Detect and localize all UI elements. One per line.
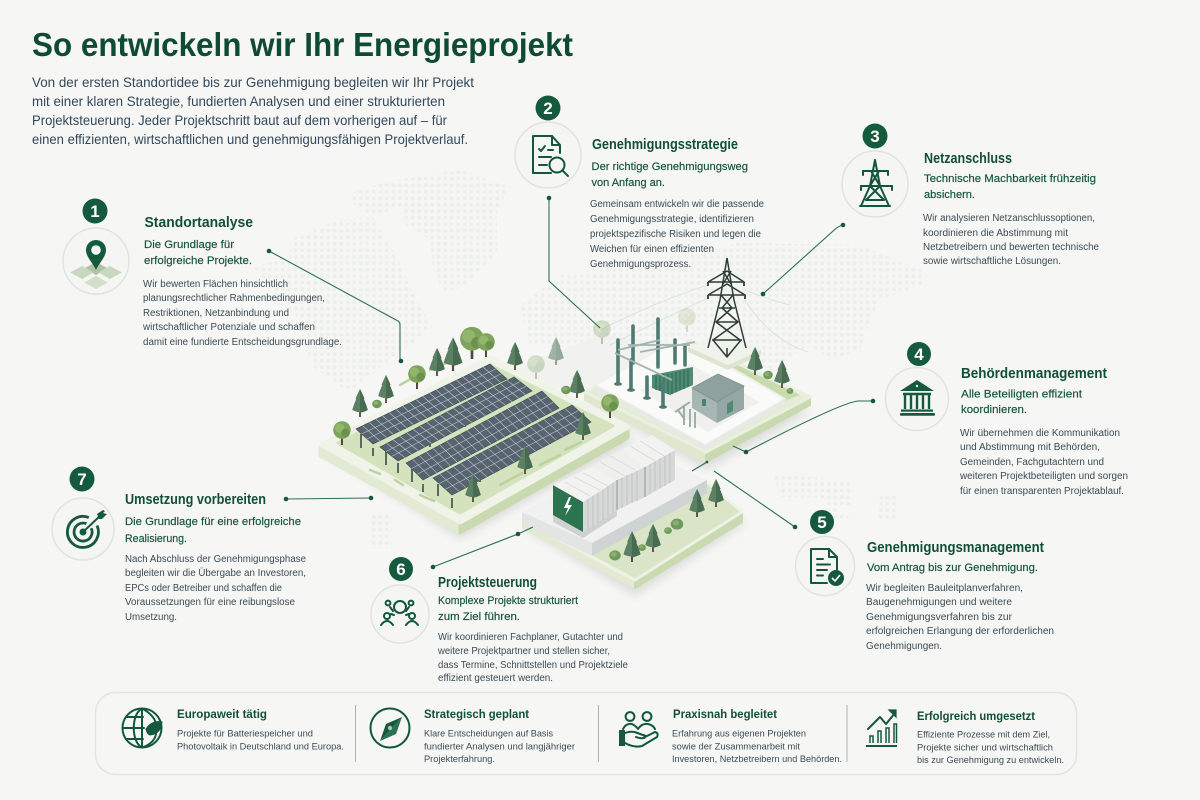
panel: footer benefits bar xyxy=(96,692,1076,774)
body text: effizient gesteuert werden. xyxy=(438,673,553,684)
body text: sowie wirtschaftliche Lösungen. xyxy=(923,256,1061,267)
benefit: Europaweit tätig xyxy=(122,708,344,752)
icon: transmission tower xyxy=(708,258,746,357)
solar panel rows xyxy=(356,364,591,508)
heading: Genehmigungsmanagement xyxy=(867,540,1044,556)
subheading xyxy=(592,161,748,189)
body text: projektspezifische Risiken und legen die xyxy=(590,229,761,240)
heading: Europaweit tätig xyxy=(177,709,267,721)
subheading: zum Ziel führen. xyxy=(438,611,520,623)
number badge 1: 1 xyxy=(90,202,100,221)
text: bis zur Genehmigung zu entwickeln. xyxy=(917,755,1064,766)
icon: pylon xyxy=(842,151,908,217)
icon: document with magnifier xyxy=(515,122,581,188)
number badge 4 xyxy=(907,342,931,366)
body text: Wir übernehmen die Kommunikation xyxy=(960,428,1120,439)
body text: dass Termine, Schnittstellen und Projektziele xyxy=(438,660,628,671)
panel: step 2 Genehmigungsstrategie xyxy=(515,96,764,270)
heading: Standortanalyse xyxy=(144,215,253,231)
number badge 6: 6 xyxy=(396,560,406,579)
battery site trees xyxy=(609,479,724,562)
body text: weiteren Projektbeteiligten und sorgen xyxy=(959,471,1128,482)
text xyxy=(424,728,575,765)
heading: Behördenmanagement xyxy=(961,366,1107,382)
subheading: Technische Machbarkeit frühzeitig xyxy=(924,173,1096,185)
body text xyxy=(866,583,1054,652)
battery storage platform xyxy=(522,447,745,596)
body text: Genehmigungsstrategie, identifizieren xyxy=(590,214,754,225)
heading: Umsetzung vorbereiten xyxy=(125,492,266,508)
body text: Gemeinden, Fachgutachtern und xyxy=(960,457,1104,468)
icon: authority building xyxy=(886,368,948,430)
text xyxy=(177,728,344,752)
text: Erfahrung aus eigenen Projekten xyxy=(672,728,806,740)
panel: step 4 Behördenmanagement xyxy=(886,342,1128,497)
battery containers xyxy=(553,435,675,538)
text: Photovoltaik in Deutschland und Europa. xyxy=(177,742,344,752)
body text: Wir bewerten Flächen hinsichtlich xyxy=(143,279,288,290)
title: So entwickeln wir Ihr Energieprojekt xyxy=(32,26,573,63)
text: Klare Entscheidungen auf Basis xyxy=(424,728,553,740)
panel: step 3 Netzanschluss xyxy=(842,124,1099,267)
icon: rising chart xyxy=(866,710,897,747)
subheading: Alle Beteiligten effizient xyxy=(961,388,1083,400)
body text: Restriktionen, Netzanbindung und xyxy=(143,308,289,319)
subheading: Die Grundlage für eine erfolgreiche xyxy=(125,516,301,528)
number badge 3: 3 xyxy=(870,127,880,146)
subheading xyxy=(438,595,579,623)
body text xyxy=(959,428,1128,497)
body text: Baugenehmigungen und weitere xyxy=(866,597,1012,608)
text: Projekterfahrung. xyxy=(424,754,495,765)
subheading xyxy=(125,516,301,545)
body text: Gemeinsam entwickeln wir die passende xyxy=(590,199,764,210)
number badge 5 xyxy=(810,510,834,534)
benefit: Praxisnah begleitet xyxy=(619,709,842,765)
number badge 2: 2 xyxy=(543,99,553,118)
subheading: Komplexe Projekte strukturiert xyxy=(438,595,579,607)
connector: step 3 xyxy=(761,223,845,296)
body text xyxy=(437,632,628,684)
icon: document with check xyxy=(796,536,854,596)
body text: für einen transparenten Projektablauf. xyxy=(960,486,1124,497)
intro text: einen effizienten, wirtschaftlichen und genehmigungsfähigen Projektverlauf. xyxy=(32,132,468,147)
subheading: Die Grundlage für xyxy=(144,239,234,251)
icon: people over hand xyxy=(619,712,658,747)
body text xyxy=(923,213,1099,267)
body text xyxy=(125,554,306,623)
subheading: koordinieren. xyxy=(961,404,1027,416)
body text: koordinieren die Abstimmung mit xyxy=(923,228,1068,239)
number badge 3 xyxy=(862,124,888,148)
body text: Wir begleiten Bauleitplanverfahren, xyxy=(866,583,1023,594)
intro text: Projektsteuerung. Jeder Projektschritt baut auf dem vorherigen auf – für xyxy=(32,113,447,128)
body text: Netzbetreibern und bewerten technische xyxy=(923,242,1099,253)
heading: Strategisch geplant xyxy=(424,709,529,721)
heading: Projektsteuerung xyxy=(438,575,537,591)
body text: Nach Abschluss der Genehmigungsphase xyxy=(125,554,306,565)
number badge 7: 7 xyxy=(77,470,87,489)
body text xyxy=(142,279,342,348)
number badge 4: 4 xyxy=(914,345,924,364)
body text xyxy=(590,199,764,270)
power lines xyxy=(600,285,808,352)
subheading xyxy=(924,173,1096,201)
body text: erfolgreichen Erlangung der erforderlichen xyxy=(866,626,1054,637)
body text: begleiten wir die Übergabe an Investoren, xyxy=(125,567,306,579)
faded access road xyxy=(505,335,690,395)
body text: Wir analysieren Netzanschlussoptionen, xyxy=(923,213,1095,224)
body text: planungsrechtlicher Rahmenbedingungen, xyxy=(143,293,325,304)
body text: Genehmigungsprozess. xyxy=(590,259,691,270)
panel: step 1 Standortanalyse xyxy=(63,198,342,348)
body text: Weichen für einen effizienten xyxy=(590,244,714,255)
text xyxy=(917,730,1064,766)
connector: step 6 xyxy=(431,527,533,569)
central isometric illustration xyxy=(320,258,810,596)
body text: Voraussetzungen für eine reibungslose xyxy=(125,597,295,608)
icon: compass xyxy=(370,708,410,748)
body text: Umsetzung. xyxy=(125,612,177,623)
text: Projekte für Batteriespeicher und xyxy=(177,728,313,740)
connector: step 1 xyxy=(267,249,403,363)
trees xyxy=(333,308,793,502)
solar field platform xyxy=(320,358,635,538)
body text: damit eine fundierte Entscheidungsgrundlage. xyxy=(143,337,342,348)
text xyxy=(672,728,842,765)
substation equipment xyxy=(614,319,695,428)
icon: location pin on plots xyxy=(63,228,129,294)
number badge 7 xyxy=(70,466,94,492)
control building xyxy=(692,374,744,423)
icon: team xyxy=(371,585,429,643)
text: Effiziente Prozesse mit dem Ziel, xyxy=(917,730,1050,740)
subheading xyxy=(961,388,1083,416)
subheading xyxy=(144,239,252,267)
heading: Praxisnah begleitet xyxy=(673,709,777,721)
text: Projekte sicher und wirtschaftlich xyxy=(917,742,1053,754)
body text: wirtschaftlicher Potenziale und schaffen xyxy=(142,322,315,333)
text: fundierter Analysen und langjähriger xyxy=(424,742,575,752)
subheading: Der richtige Genehmigungsweg xyxy=(592,161,748,173)
subheading: Realisierung. xyxy=(125,533,187,545)
icon: target with arrow xyxy=(52,498,114,560)
number badge 5: 5 xyxy=(817,513,827,532)
transformer xyxy=(652,367,693,395)
benefit: Strategisch geplant xyxy=(370,708,575,765)
connector: step 2 xyxy=(547,196,600,328)
panel: step 6 Projektsteuerung xyxy=(371,557,628,684)
number badge 2 xyxy=(536,96,560,120)
panel: step 5 Genehmigungsmanagement xyxy=(796,510,1054,652)
body text: Genehmigungen. xyxy=(866,641,942,652)
number badge 1 xyxy=(82,198,108,224)
heading: Genehmigungsstrategie xyxy=(592,137,738,153)
icon: globe with leaf xyxy=(122,708,162,748)
body text: Wir koordinieren Fachplaner, Gutachter und xyxy=(438,632,623,643)
connector: step 7 xyxy=(284,496,373,501)
body text: weitere Projektpartner und stellen sicher, xyxy=(437,646,610,657)
number badge 6 xyxy=(389,557,413,581)
connector: step 4 xyxy=(692,399,875,471)
subheading: erfolgreiche Projekte. xyxy=(144,255,252,267)
subheading: von Anfang an. xyxy=(592,177,665,189)
intro text: Von der ersten Standortidee bis zur Genehmigung begleiten wir Ihr Projekt xyxy=(32,75,474,90)
body text: EPCs oder Betreiber und schaffen die xyxy=(125,583,282,594)
connector: step 5 xyxy=(714,471,797,529)
benefit: Erfolgreich umgesetzt xyxy=(866,710,1064,766)
heading: Erfolgreich umgesetzt xyxy=(917,711,1035,723)
tower platform xyxy=(688,330,761,370)
dotted world map background xyxy=(253,170,922,548)
substation platform xyxy=(585,338,810,470)
subheading: absichern. xyxy=(924,189,975,201)
text: sowie der Zusammenarbeit mit xyxy=(672,742,800,752)
body text: Genehmigungsverfahren bis zur xyxy=(866,612,1013,623)
connector lines xyxy=(267,196,875,569)
panel: step 7 Umsetzung vorbereiten xyxy=(52,466,306,623)
heading: Netzanschluss xyxy=(924,151,1012,167)
intro text: mit einer klaren Strategie, fundierten Analysen und einer strukturierten xyxy=(32,94,445,109)
intro text xyxy=(32,75,474,147)
text: Investoren, Netzbetreibern und Behörden. xyxy=(672,754,842,765)
subheading: Vom Antrag bis zur Genehmigung. xyxy=(867,562,1038,574)
body text: und Abstimmung mit Behörden, xyxy=(960,442,1100,453)
